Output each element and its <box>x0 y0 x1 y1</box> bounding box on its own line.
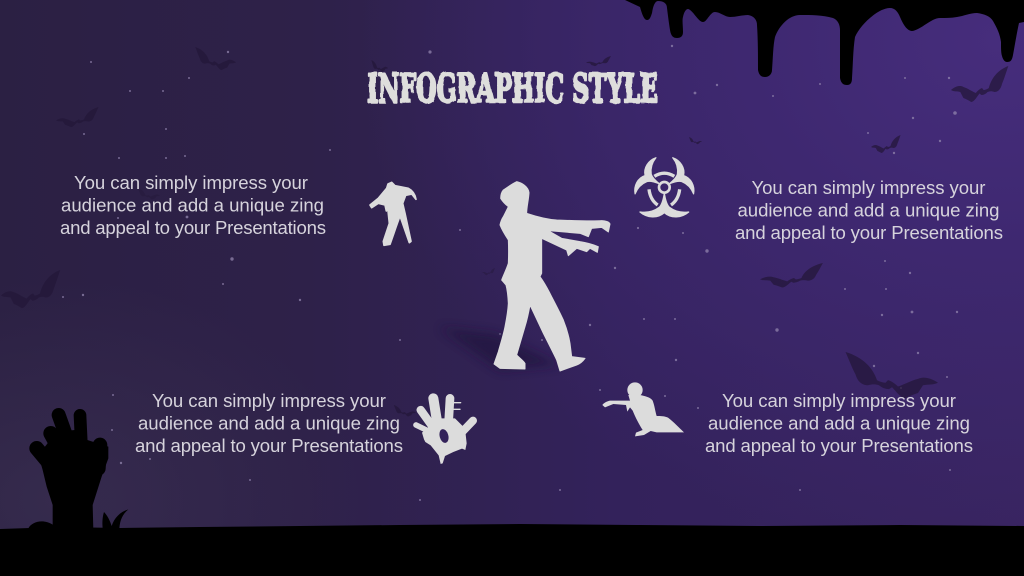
central zombie <box>494 182 610 371</box>
text block: top right: You can simply impress your <box>752 177 986 198</box>
text block: bottom right: You can simply impress your <box>722 390 956 411</box>
text block: top left: and appeal to your Presentations <box>60 217 326 238</box>
text block: bottom right: and appeal to your Presentations <box>705 435 973 456</box>
text block: top left <box>60 172 326 238</box>
text block: top left: You can simply impress your <box>74 172 308 193</box>
text block: bottom left: You can simply impress your <box>152 390 386 411</box>
icon: crawling zombie <box>602 382 684 436</box>
text block: top right: audience and add a unique zing <box>738 200 1000 220</box>
zombie hand from the ground <box>37 415 108 530</box>
background stars <box>62 45 958 501</box>
bats <box>1 47 1008 417</box>
mound and grass <box>28 509 128 528</box>
text block: bottom right <box>705 390 973 456</box>
text block: bottom left: and appeal to your Presentations <box>135 435 403 456</box>
text block: top left: audience and add a unique zing <box>61 194 324 216</box>
text block: top right <box>735 177 1003 243</box>
icon: biohazard <box>631 156 697 217</box>
central zombie shadow <box>440 328 560 370</box>
text block: bottom right: audience and add a unique zing <box>708 412 970 434</box>
ground <box>0 524 1024 576</box>
icon: small zombie <box>370 182 416 245</box>
text block: top right: and appeal to your Presentations <box>735 222 1003 243</box>
title: INFOGRAPHIC STYLE <box>367 66 658 112</box>
text block: bottom left: audience and add a unique zing <box>138 412 400 434</box>
icon: dripping hand print <box>416 398 473 464</box>
text block: bottom left <box>135 390 403 456</box>
black drips top <box>625 0 1024 85</box>
